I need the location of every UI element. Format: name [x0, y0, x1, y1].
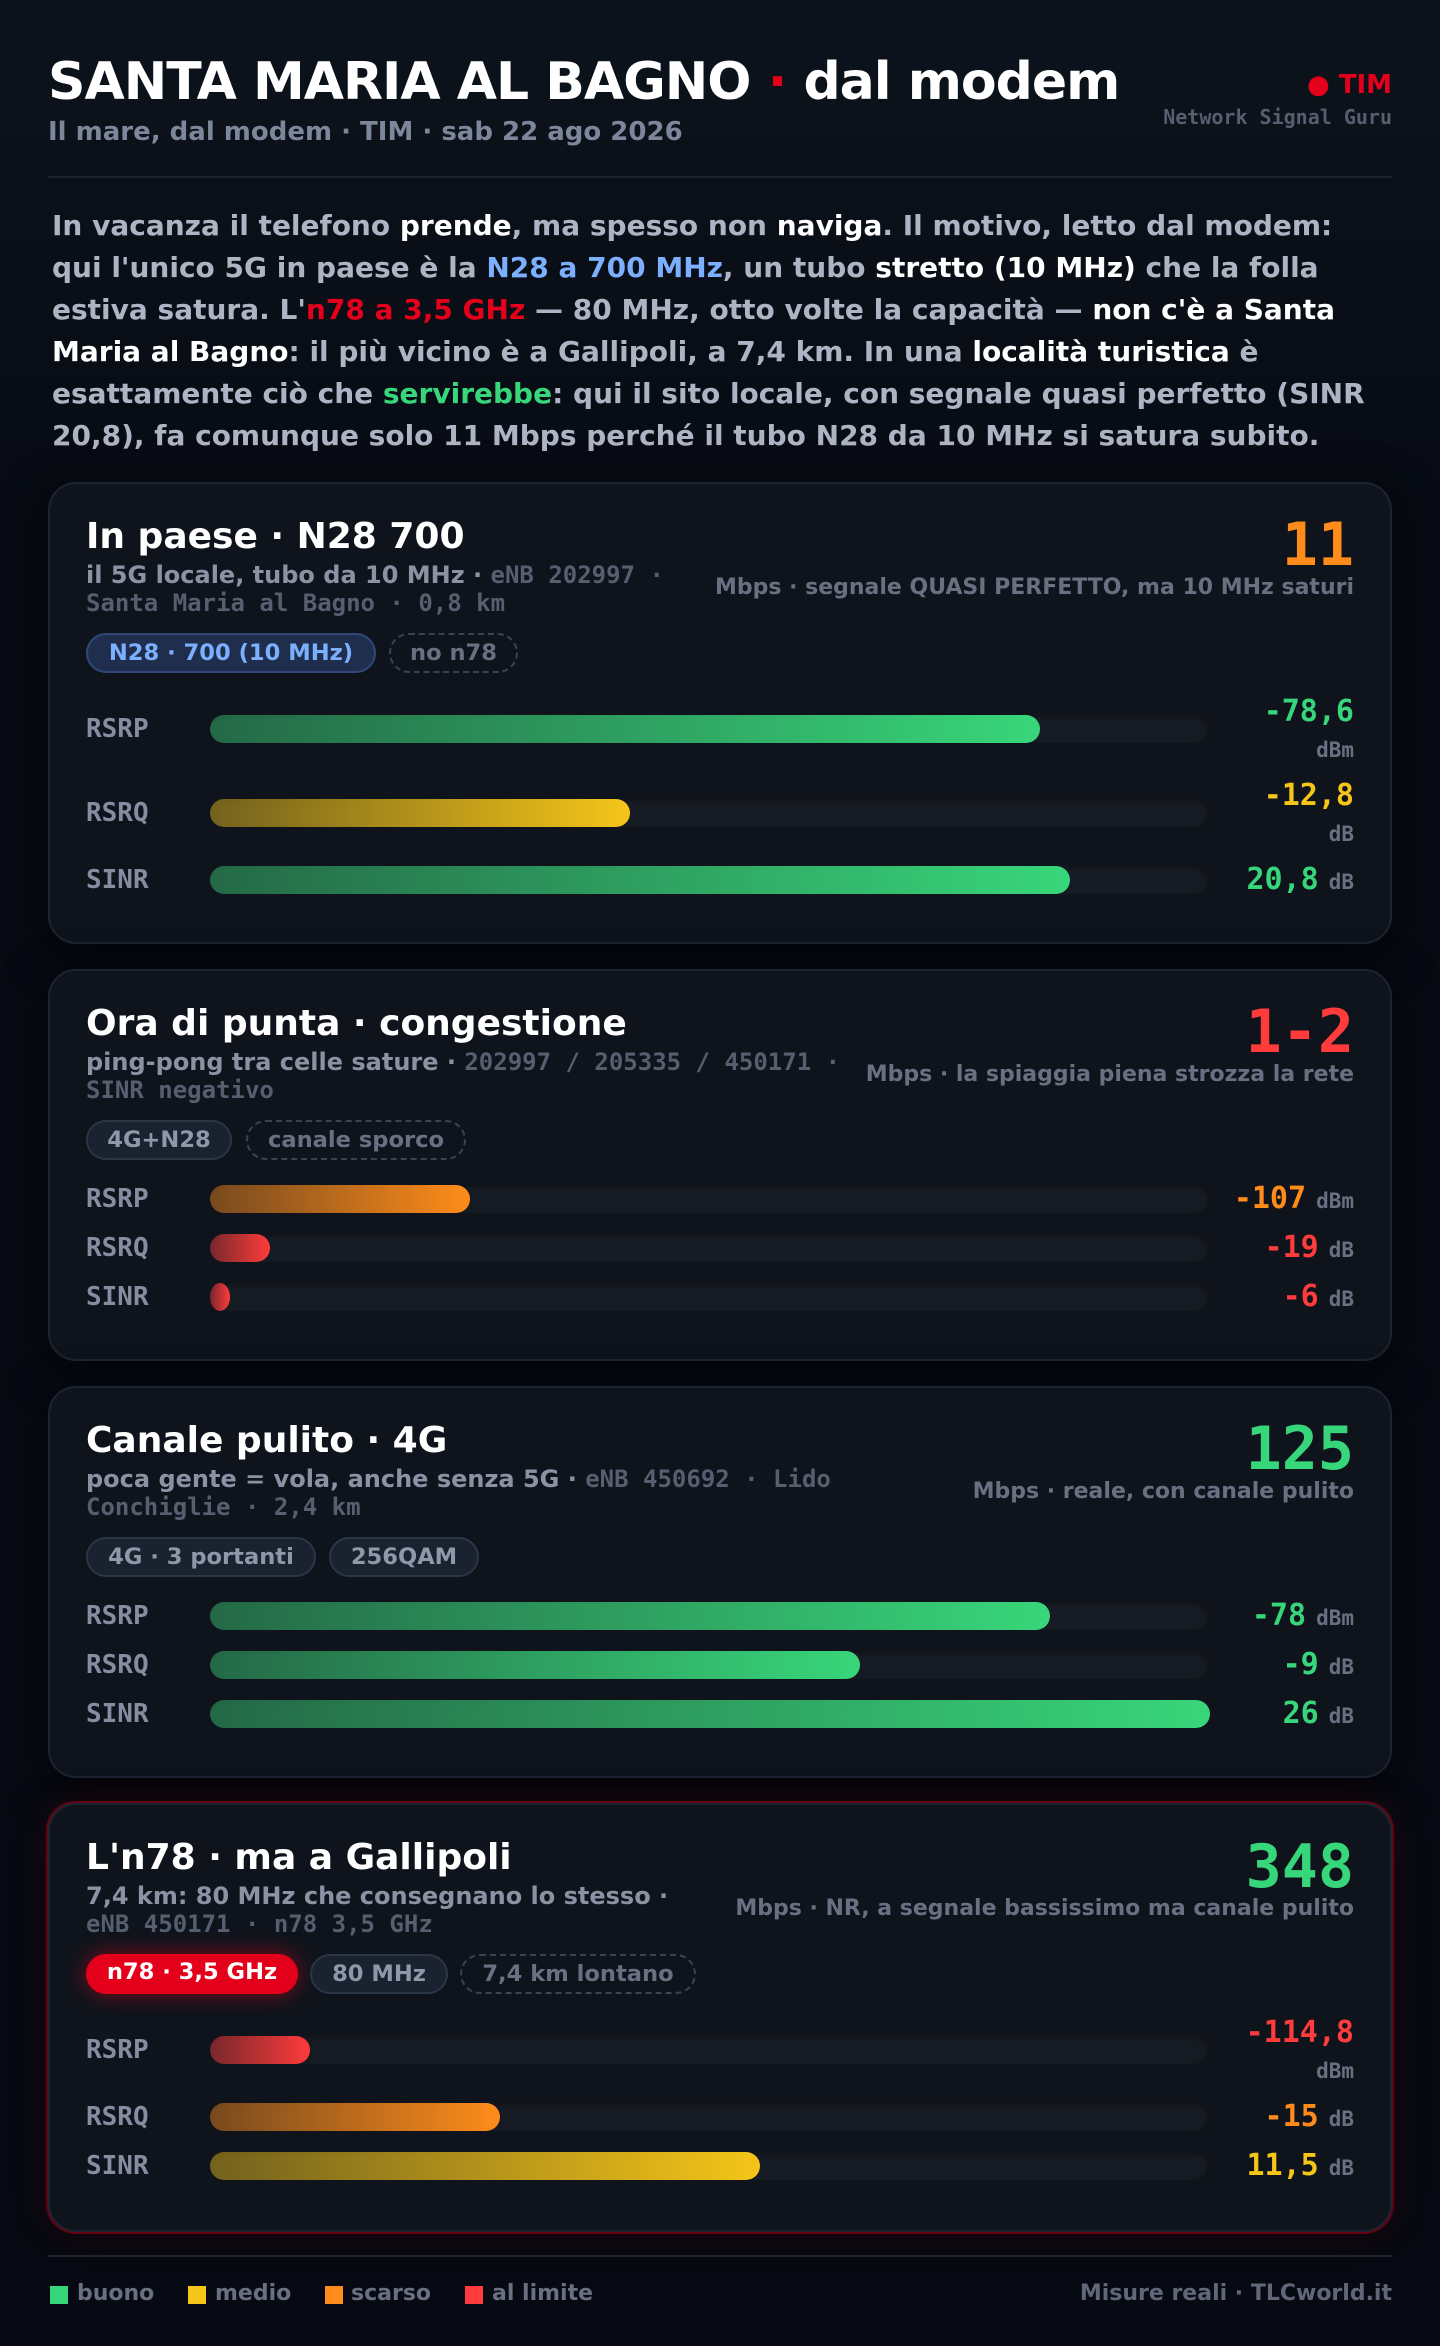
card heading: Ora di punta · congestione [86, 1003, 627, 1044]
band pills: 4G · 3 portanti [108, 1544, 294, 1570]
legend label: buono: buono [77, 2281, 154, 2306]
metric: RSRQ [86, 1230, 1354, 1265]
metric: SINR: SINR [86, 1699, 149, 1729]
metric: RSRP: RSRP [86, 2035, 149, 2065]
intro text [52, 209, 1365, 452]
metric: RSRQ: RSRQ [86, 1650, 149, 1680]
legend label: medio: medio [215, 2281, 291, 2306]
footer divider [48, 2255, 1392, 2257]
intro text: qui l'unico 5G in paese è la N28 a 700 MHz, un tubo stretto (10 MHz) che la folla [52, 251, 1319, 284]
subtitle: Il mare, dal modem · TIM · sab 22 ago 2026 [48, 117, 683, 147]
operator badge: TIM: ● TIM [1307, 70, 1392, 100]
card subtitle: ping-pong tra celle sature · 202997 / 205335 / 450171 · [86, 1048, 840, 1076]
panel: In paese N28 700: dBm [1316, 738, 1354, 762]
metric: SINR [86, 862, 1354, 897]
card subtitle [86, 1048, 840, 1104]
panel: In paese N28 700: dB [1329, 822, 1354, 846]
band pills [86, 633, 518, 673]
speed note: Mbps · la spiaggia piena strozza la rete [866, 1062, 1354, 1087]
band pills: 256QAM [351, 1544, 457, 1570]
footer credit: Misure reali · TLCworld.it [1080, 2281, 1392, 2306]
band pills [86, 1120, 466, 1160]
panel: In paese N28 700: -78,6 [1264, 694, 1354, 729]
metric: SINR: SINR [86, 1282, 149, 1312]
card subtitle: poca gente = vola, anche senza 5G · eNB 450692 · Lido [86, 1465, 831, 1493]
intro text: Maria al Bagno: il più vicino è a Gallipoli, a 7,4 km. In una località turistica è [52, 335, 1259, 368]
metric: RSRP [86, 1598, 1354, 1633]
metric: SINR [86, 2148, 1354, 2183]
intro text: esattamente ciò che servirebbe: qui il sito locale, con segnale quasi perfetto (SINR [52, 377, 1365, 410]
metric: RSRP: RSRP [86, 714, 149, 744]
metric: RSRQ [86, 2099, 1354, 2134]
speed note: Mbps · segnale QUASI PERFETTO, ma 10 MHz saturi [715, 575, 1354, 600]
speed value: 1-2 [1246, 997, 1354, 1067]
card subtitle [86, 561, 664, 617]
legend swatch: al limite [465, 2286, 483, 2304]
speed note: Mbps · reale, con canale pulito [973, 1479, 1354, 1504]
speed value: 11 [1282, 510, 1354, 580]
metric: RSRP [86, 694, 1354, 762]
band pills: no n78 [410, 640, 497, 666]
speed value: 125 [1246, 1414, 1354, 1484]
metric: RSRQ: RSRQ [86, 2102, 149, 2132]
card subtitle: eNB 450171 · n78 3,5 GHz [86, 1910, 433, 1938]
band pills: 4G+N28 [107, 1127, 211, 1153]
intro text: estiva satura. L'n78 a 3,5 GHz — 80 MHz, otto volte la capacità — non c'è a Santa [52, 293, 1335, 326]
metric: RSRQ [86, 1647, 1354, 1682]
card subtitle: Conchiglie · 2,4 km [86, 1493, 361, 1521]
metric: RSRQ [86, 778, 1354, 846]
metric: RSRQ: -19 dB [1265, 1230, 1354, 1265]
metric: RSRQ: -9 dB [1283, 1647, 1354, 1682]
intro text: 20,8), fa comunque solo 11 Mbps perché il tubo N28 da 10 MHz si satura subito. [52, 419, 1319, 452]
card subtitle: Santa Maria al Bagno · 0,8 km [86, 589, 505, 617]
metric: SINR: SINR [86, 2151, 149, 2181]
legend label: al limite: al limite [492, 2281, 593, 2306]
legend swatch: buono [50, 2286, 68, 2304]
metric: SINR: -6 dB [1283, 1279, 1354, 1314]
brand: Network Signal Guru: Network Signal Guru [1163, 105, 1392, 129]
metric: SINR: 11,5 dB [1246, 2148, 1354, 2183]
panel: Canale pulito 4G [48, 1386, 1392, 1778]
card heading: Canale pulito · 4G [86, 1420, 447, 1461]
metric: RSRQ: RSRQ [86, 1233, 149, 1263]
title: SANTA MARIA AL BAGNO · dal modem [48, 52, 1119, 112]
panel: In paese N28 700: -12,8 [1264, 778, 1354, 813]
band pills: n78 · 3,5 GHz [107, 1959, 277, 1985]
band pills [74, 1939, 696, 2009]
metric: RSRP [86, 1181, 1354, 1216]
metric: SINR: 26 dB [1283, 1696, 1354, 1731]
card heading: L'n78 · ma a Gallipoli [86, 1837, 512, 1878]
panel: L'n78 ma a Gallipoli: -114,8 [1246, 2015, 1354, 2050]
metric: RSRP [86, 2015, 1354, 2083]
metric: RSRP: -107 dBm [1234, 1181, 1354, 1216]
metric: RSRP: RSRP [86, 1601, 149, 1631]
intro text: In vacanza il telefono prende, ma spesso non naviga. Il motivo, letto dal modem: [52, 209, 1332, 242]
metric: SINR [86, 1696, 1354, 1731]
panel: In paese N28 700 [48, 482, 1392, 944]
metric: SINR [86, 1279, 1354, 1314]
card subtitle: SINR negativo [86, 1076, 274, 1104]
panel: Ora di punta congestione [48, 969, 1392, 1361]
speed value: 348 [1246, 1832, 1354, 1902]
card subtitle [86, 1465, 831, 1521]
band pills: canale sporco [268, 1127, 444, 1153]
legend swatch: scarso [325, 2286, 343, 2304]
card subtitle: 7,4 km: 80 MHz che consegnano lo stesso · [86, 1882, 668, 1910]
header divider [48, 176, 1392, 178]
band pills [86, 1537, 479, 1577]
card subtitle [86, 1882, 668, 1938]
metric: SINR: 20,8 dB [1246, 862, 1354, 897]
card subtitle: il 5G locale, tubo da 10 MHz · eNB 202997 · [86, 561, 664, 589]
speed note: Mbps · NR, a segnale bassissimo ma canale pulito [735, 1896, 1354, 1921]
metric: RSRQ: -15 dB [1265, 2099, 1354, 2134]
card heading: In paese · N28 700 [86, 516, 465, 557]
metric: SINR: SINR [86, 865, 149, 895]
legend swatch: medio [188, 2286, 206, 2304]
metric: RSRP: -78 dBm [1252, 1598, 1354, 1633]
legend label: scarso: scarso [351, 2281, 431, 2306]
band pills: 7,4 km lontano [482, 1961, 674, 1987]
band pills: 80 MHz [332, 1961, 426, 1987]
metric: RSRP: RSRP [86, 1184, 149, 1214]
panel: L'n78 ma a Gallipoli: dBm [1316, 2059, 1354, 2083]
band pills: N28 · 700 (10 MHz) [109, 640, 353, 666]
panel: L'n78 ma a Gallipoli [48, 1803, 1392, 2232]
metric: RSRQ: RSRQ [86, 798, 149, 828]
